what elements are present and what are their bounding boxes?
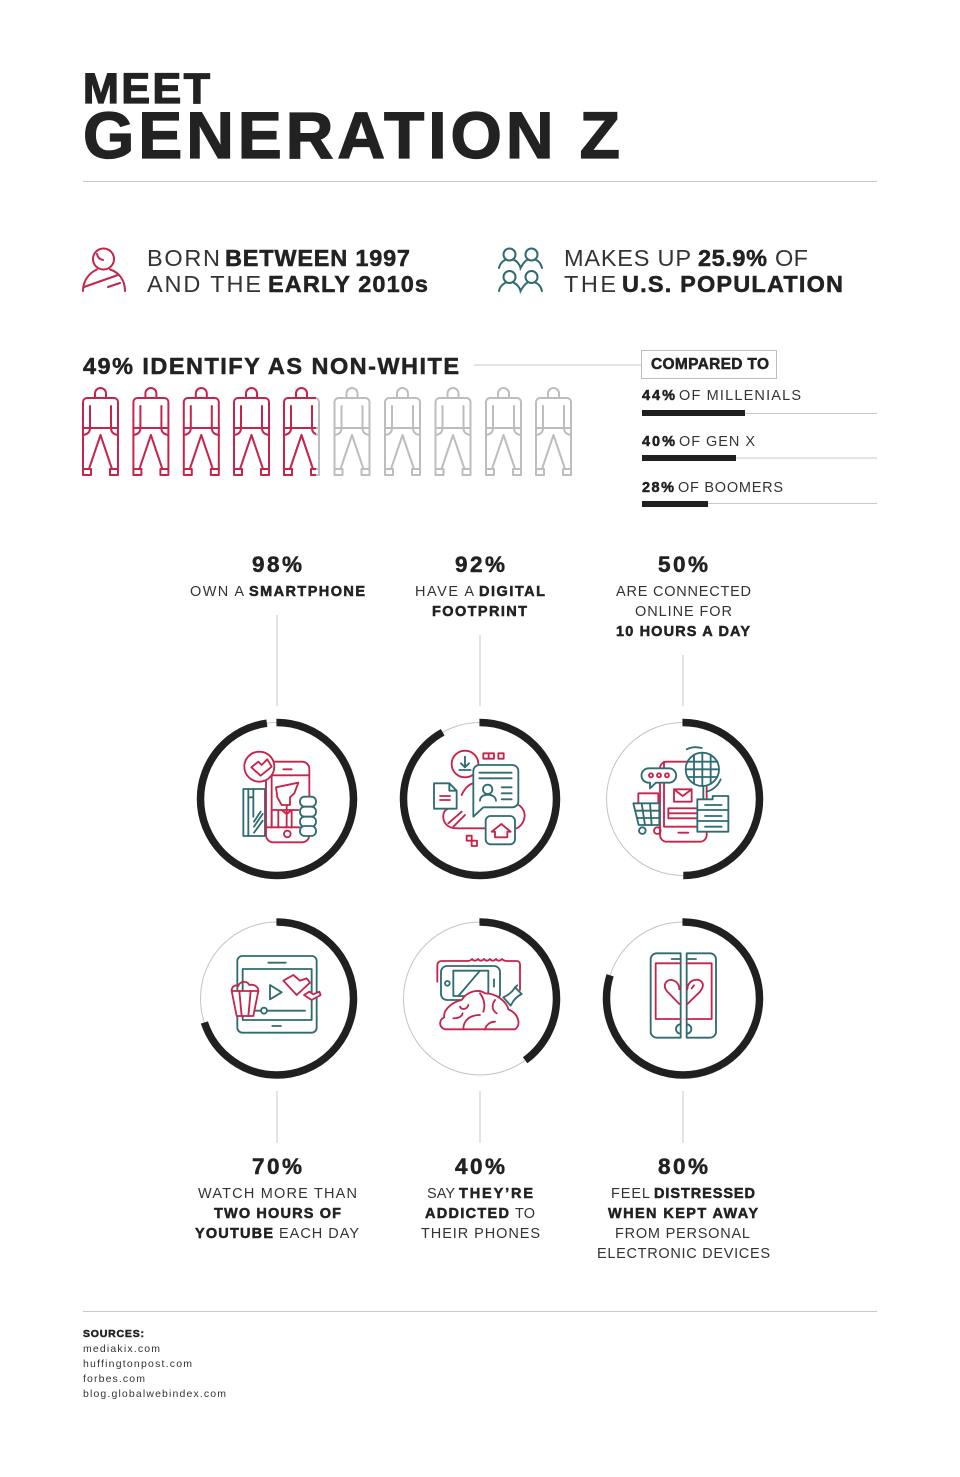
text: born between: AND THE (147, 271, 261, 297)
stat: 70 percent youtube: WATCH MORE THAN (198, 1186, 357, 1202)
stat: 40 percent addicted: ADDICTED (425, 1206, 509, 1222)
stat: 40 percent addicted: TO (515, 1206, 535, 1222)
stat: 70 percent youtube: EACH DAY (279, 1226, 359, 1242)
sources: mediakix.com (83, 1343, 160, 1355)
text: born between: EARLY 2010s (268, 271, 428, 297)
text: population share: 25.9% (698, 245, 767, 271)
donut: 40 percent (404, 922, 556, 1075)
bar: millenials 44%: 44% (642, 388, 675, 404)
bar: boomers 28%: 28% (642, 480, 674, 496)
population fact (499, 245, 843, 297)
stat: 50 percent online: 50% (658, 552, 708, 577)
heading: non-white share: 49% IDENTIFY AS NON-WHITE (83, 353, 459, 379)
bar: gen x 40% (642, 434, 877, 461)
icon: group of people (499, 248, 542, 291)
stat: 40 percent addicted: SAY (427, 1186, 455, 1202)
icon: video and popcorn (232, 956, 321, 1033)
sources: forbes.com (83, 1373, 145, 1385)
stat: 92 percent digital footprint: FOOTPRINT (432, 604, 527, 620)
stat: 92 percent digital footprint: HAVE A (415, 584, 474, 600)
text: born between: BETWEEN 1997 (225, 245, 410, 271)
bar: boomers 28% (642, 480, 877, 507)
bar: millenials 44%: OF MILLENIALS (679, 388, 801, 404)
label: compared to (642, 350, 776, 378)
stat: 80 percent distressed: FROM PERSONAL (615, 1226, 750, 1242)
pictogram: 10 figures, 49 percent red (83, 388, 571, 475)
stat: 92 percent digital footprint (415, 552, 545, 706)
stat: 70 percent youtube: YOUTUBE (195, 1226, 273, 1242)
text: population share: U.S. POPULATION (622, 271, 843, 297)
stat: 98 percent smartphone (190, 552, 365, 706)
donut: 50 percent (606, 722, 760, 876)
icon: connected devices (633, 747, 728, 842)
text: population share: OF (775, 245, 808, 271)
stat: 80 percent distressed: 80% (658, 1154, 708, 1179)
stat: 92 percent digital footprint: 92% (455, 552, 505, 577)
stat: 92 percent digital footprint: DIGITAL (479, 584, 545, 600)
bar: millenials 44% (642, 388, 877, 416)
stat: 80 percent distressed: FEEL (611, 1186, 650, 1202)
text: population share (564, 245, 843, 297)
stat: 40 percent addicted (421, 1091, 540, 1242)
bar: boomers 28%: OF BOOMERS (678, 480, 783, 496)
bar: gen x 40%: 40% (642, 434, 675, 450)
stat: 80 percent distressed (597, 1091, 770, 1262)
sources: SOURCES: (83, 1328, 144, 1340)
stat: 50 percent online (616, 552, 751, 706)
stat: 70 percent youtube: 70% (252, 1154, 302, 1179)
stat: 98 percent smartphone: OWN A (190, 584, 244, 600)
sources: blog.globalwebindex.com (83, 1388, 226, 1400)
stat: 50 percent online: 10 HOURS A DAY (616, 624, 750, 640)
stat: 40 percent addicted: 40% (455, 1154, 505, 1179)
stat: 80 percent distressed: WHEN KEPT AWAY (608, 1206, 758, 1222)
stat: 50 percent online: ONLINE FOR (635, 604, 732, 620)
stat: 40 percent addicted: THEIR PHONES (421, 1226, 540, 1242)
stat: 80 percent distressed: DISTRESSED (654, 1186, 755, 1202)
text: born between: BORN (147, 245, 220, 271)
bar: gen x 40%: OF GEN X (679, 434, 755, 450)
icon: digital footprint (434, 751, 525, 846)
donut: 92 percent (404, 722, 556, 876)
stat: 70 percent youtube (195, 1091, 359, 1242)
stat: 70 percent youtube: TWO HOURS OF (214, 1206, 341, 1222)
birth years fact (83, 245, 428, 297)
icon: person (83, 248, 125, 291)
text: population share: MAKES UP (564, 245, 691, 271)
stat: 98 percent smartphone: SMARTPHONE (249, 584, 365, 600)
title: MEET (83, 65, 210, 113)
stat: 40 percent addicted: THEY’RE (459, 1186, 533, 1202)
donut: 80 percent (606, 922, 760, 1075)
stat: 98 percent smartphone: 98% (252, 552, 302, 577)
title (83, 65, 620, 172)
sources (83, 1328, 226, 1400)
label: compared to: COMPARED TO (651, 356, 769, 373)
text: population share: THE (564, 271, 616, 297)
stat: 50 percent online: ARE CONNECTED (616, 584, 751, 600)
icon: split phone with heart (651, 953, 716, 1038)
icon: smartphone in hand (243, 752, 316, 842)
icon: phone and brain (437, 959, 522, 1029)
text: born between (147, 245, 428, 297)
stat: 80 percent distressed: ELECTRONIC DEVICES (597, 1246, 770, 1262)
donut: 98 percent (200, 722, 354, 876)
sources: huffingtonpost.com (83, 1358, 192, 1370)
donut: 70 percent (200, 922, 354, 1075)
title: GENERATION Z (83, 98, 620, 172)
panel: compared to (642, 350, 877, 507)
